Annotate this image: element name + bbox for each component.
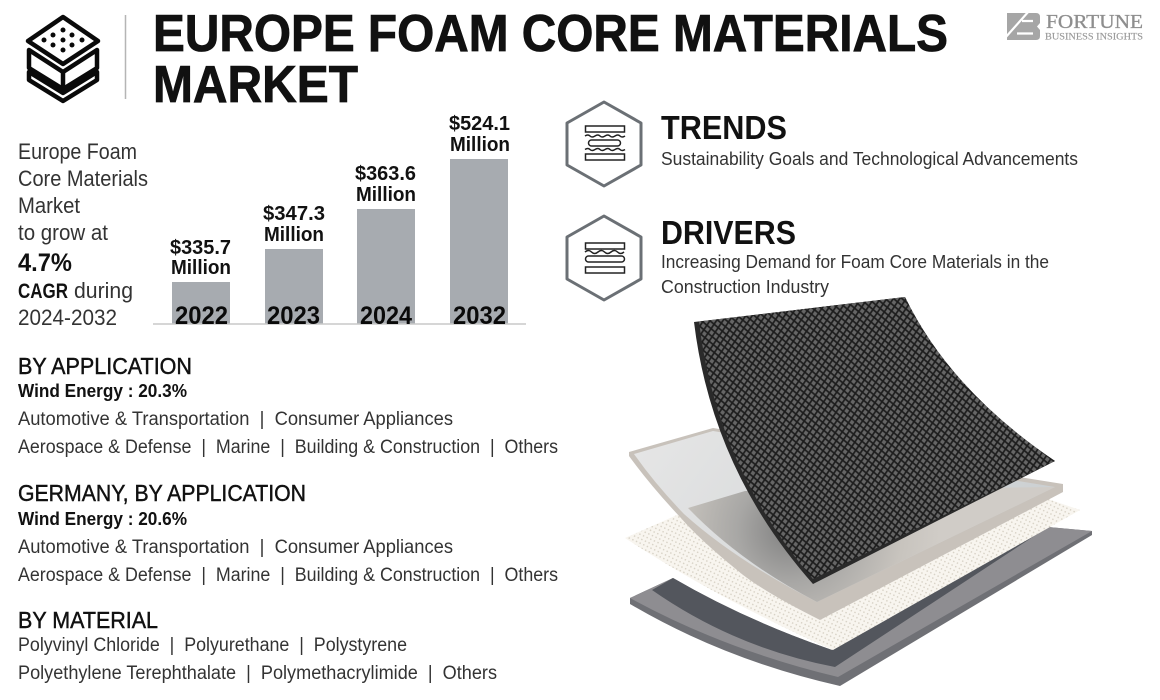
bar chart: market size: 2023 <box>267 302 320 330</box>
bar chart: market size: 2032 <box>453 302 506 330</box>
title <box>153 5 948 114</box>
layer: translucent sheet <box>629 428 1063 620</box>
bar chart: market size: $524.1 <box>449 113 510 135</box>
logo: Fortune Business Insights <box>1005 11 1143 42</box>
bar chart: market size <box>153 113 526 330</box>
bar chart: market size: 2024 <box>360 302 412 330</box>
panel: by material <box>18 607 497 684</box>
heading: drivers: Increasing Demand for Foam Core Materials in the <box>661 251 1049 272</box>
layer: black diamond sheet <box>694 297 1055 584</box>
panel: by material: Polyvinyl Chloride | Polyurethane | Polystyrene <box>18 635 407 656</box>
logo: Fortune Business Insights: BUSINESS INSIGHTS <box>1045 32 1143 42</box>
panel: by application <box>18 353 558 458</box>
title: EUROPE FOAM CORE MATERIALS <box>153 5 948 63</box>
text block: market growth: during <box>74 278 133 303</box>
layer: grey base sheet <box>630 527 1092 686</box>
text block: market growth <box>18 139 148 330</box>
text block: market growth: Core Materials <box>18 166 148 191</box>
text block: market growth: Europe Foam <box>18 139 137 164</box>
title: MARKET <box>153 56 358 114</box>
logo: Fortune Business Insights: FORTUNE <box>1046 12 1143 33</box>
heading: drivers <box>661 214 1049 297</box>
icon: trends hexagon <box>567 102 641 186</box>
panel: by application: Aerospace & Defense | Marine | Building & Construction | Others <box>18 437 558 458</box>
bar chart: market size: Million <box>264 224 324 246</box>
panel: by application: Wind Energy : 20.3% <box>18 381 187 401</box>
text block: market growth: CAGR <box>18 280 68 303</box>
bar chart: market size: 2022 <box>175 302 228 330</box>
panel: by application: BY APPLICATION <box>18 353 192 379</box>
heading: drivers: Construction Industry <box>661 276 830 297</box>
bar chart: market size: $335.7 <box>170 237 231 259</box>
layer: woven fabric sheet <box>625 498 1080 650</box>
panel: Germany by application: Automotive & Transportation | Consumer Appliances <box>18 537 453 558</box>
heading: drivers: DRIVERS <box>661 214 796 251</box>
bar chart: market size: Million <box>356 184 416 206</box>
bar chart: market size: Million <box>171 257 231 279</box>
panel: Germany by application: Aerospace & Defense | Marine | Building & Construction | Others <box>18 565 558 586</box>
text block: market growth: 4.7% <box>18 249 72 277</box>
illustration: foam core layers <box>625 297 1092 686</box>
panel: by material: Polyethylene Terephthalate | Polymethacrylimide | Others <box>18 663 497 684</box>
bar chart: market size: Million <box>450 134 510 156</box>
panel: by application: Automotive & Transportation | Consumer Appliances <box>18 409 453 430</box>
panel: by material: BY MATERIAL <box>18 607 158 633</box>
panel: Germany by application <box>18 480 558 586</box>
bar chart: market size: $363.6 <box>355 163 416 185</box>
bar chart: market size: $347.3 <box>263 203 325 225</box>
icon: foam core layers logo <box>28 17 98 101</box>
panel: Germany by application: GERMANY, BY APPLICATION <box>18 480 306 506</box>
icon: drivers hexagon <box>567 216 641 300</box>
text block: market growth: 2024-2032 <box>18 305 117 330</box>
text block: market growth: to grow at <box>18 220 108 245</box>
heading: trends <box>661 109 1078 169</box>
heading: trends: Sustainability Goals and Technological Advancements <box>661 148 1078 169</box>
panel: Germany by application: Wind Energy : 20.6% <box>18 509 187 529</box>
heading: trends: TRENDS <box>661 109 787 146</box>
text block: market growth: Market <box>18 193 80 218</box>
